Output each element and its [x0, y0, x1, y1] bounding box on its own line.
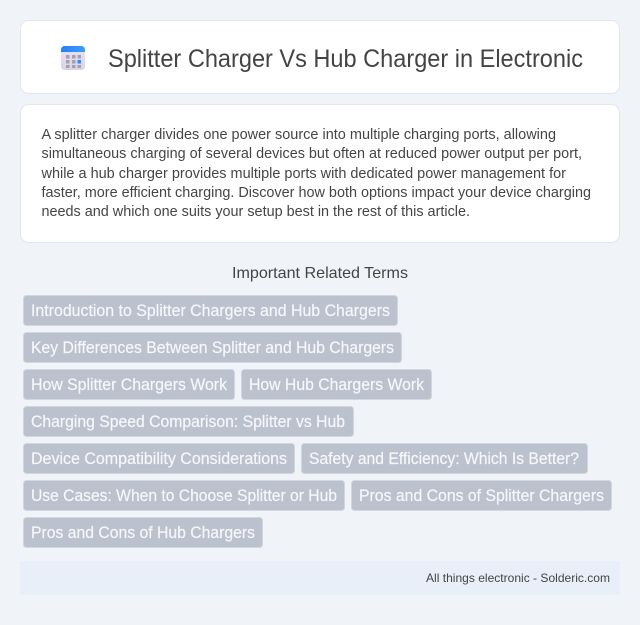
panel: intro paragraph: [20, 104, 620, 242]
tag: how splitter chargers work: [24, 370, 234, 400]
tag: introduction: [24, 296, 398, 326]
tag: pros and cons hub: [24, 518, 262, 548]
tag: device compatibility: [24, 444, 294, 474]
tag: charging speed: Charging Speed Comparison: Splitter vs Hub: [31, 413, 345, 431]
panel: related term tags: [24, 296, 612, 548]
title: Splitter Charger Vs Hub Charger in Electronic: [108, 45, 583, 73]
tag: introduction: Introduction to Splitter Chargers and Hub Chargers: [31, 302, 390, 320]
text block: intro: A splitter charger divides one power source into multiple charging ports, allowing: [42, 126, 556, 143]
panel: title card: [20, 20, 620, 94]
icon: calendar: [61, 46, 85, 70]
tag: key differences: Key Differences Between Splitter and Hub Chargers: [31, 339, 394, 357]
footer: All things electronic - Solderic.com: [426, 571, 610, 585]
footer: [20, 561, 620, 595]
text block: intro: needs and which one suits your setup best in the rest of this article.: [42, 203, 470, 220]
tag: charging speed: [24, 406, 354, 436]
tag: key differences: [24, 332, 402, 362]
text block: intro: while a hub charger provides multiple ports with dedicated power management for: [41, 165, 566, 182]
tag: pros and cons splitter: Pros and Cons of Splitter Chargers: [359, 487, 604, 505]
tag: how splitter chargers work: How Splitter Chargers Work: [31, 376, 228, 394]
text block: intro: simultaneous charging of several devices but often at reduced power output per port,: [42, 145, 582, 162]
tag: pros and cons hub: Pros and Cons of Hub Chargers: [31, 524, 255, 542]
tag: use cases: [24, 480, 344, 510]
tag: safety and efficiency: Safety and Efficiency: Which Is Better?: [309, 450, 579, 468]
tag: how hub chargers work: How Hub Chargers Work: [249, 376, 425, 394]
heading: related terms: Important Related Terms: [232, 265, 408, 282]
text block: intro: [41, 126, 591, 220]
tag: safety and efficiency: [302, 444, 588, 474]
tag: use cases: Use Cases: When to Choose Splitter or Hub: [31, 487, 337, 505]
text block: intro: faster, more efficient charging. Discover how both options impact your device charging: [42, 184, 591, 201]
tag: how hub chargers work: [242, 370, 432, 400]
tag: device compatibility: Device Compatibility Considerations: [31, 450, 287, 468]
tag: pros and cons splitter: [352, 480, 612, 510]
